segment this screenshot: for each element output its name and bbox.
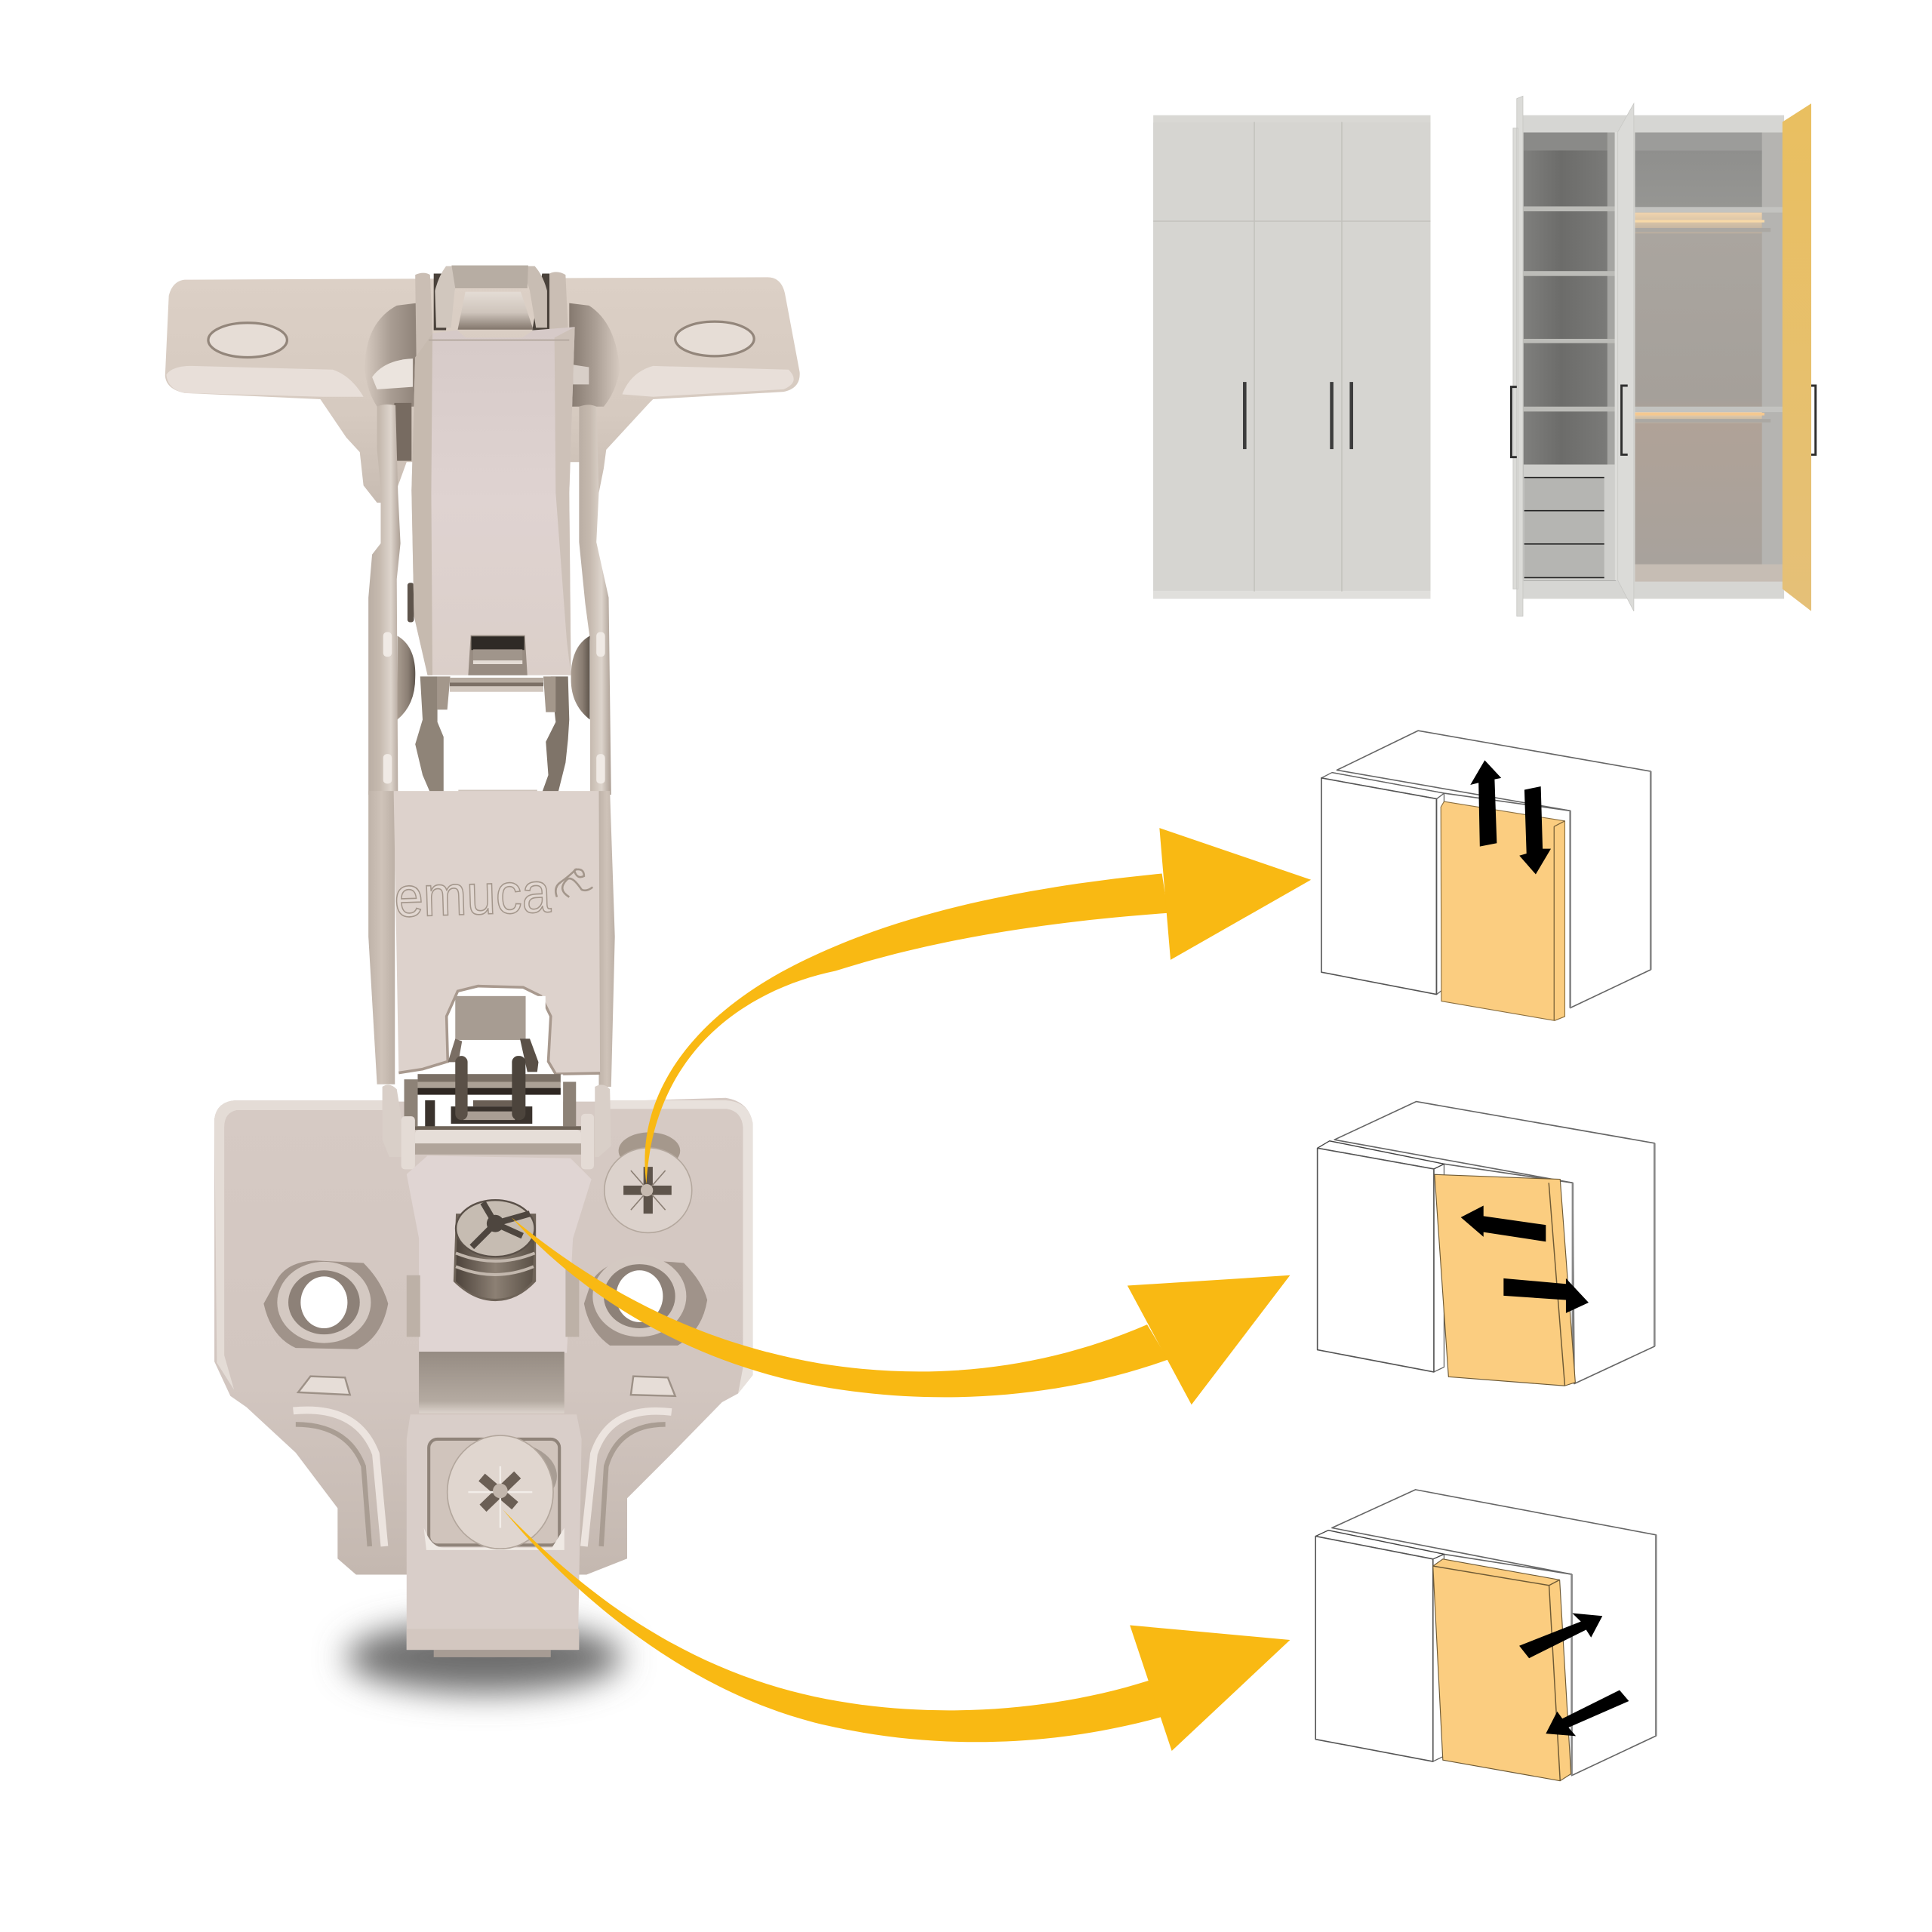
hinge mounting plate: [214, 1098, 753, 1575]
left compartment: [1524, 133, 1616, 581]
side arms: [368, 403, 611, 795]
left hole: [263, 1260, 388, 1349]
wardrobe open: [1511, 96, 1816, 616]
lower block: [407, 1414, 582, 1657]
window under bracket: [419, 1352, 565, 1414]
side screw: [605, 1132, 692, 1232]
arrow up: [1470, 760, 1501, 847]
arrow right: [1503, 1278, 1589, 1313]
ribs: [294, 1410, 672, 1546]
adjustment screw: [454, 1200, 536, 1301]
diagram: vertical adjustment: [1321, 731, 1651, 1020]
yellow door: [1783, 103, 1811, 611]
icon: handles open wardrobe: [1511, 386, 1816, 457]
left door edge: [1513, 96, 1523, 616]
right hole: [584, 1256, 707, 1346]
arrow: middle screw to lateral adjustment: [512, 1217, 1290, 1404]
shadow: [346, 1622, 622, 1693]
lower arm: [368, 790, 615, 1087]
drawers: [1524, 478, 1604, 578]
arrow left: [1461, 1206, 1546, 1241]
links between arms: [415, 676, 569, 792]
bottom screw: [448, 1435, 557, 1549]
cover slot: [468, 635, 528, 675]
hinge pivot: [383, 1056, 611, 1169]
hinge mounting cup plate top: [165, 277, 800, 503]
centre door edge: [1618, 103, 1634, 611]
arrow up right: [1519, 1613, 1602, 1658]
wardrobe closed: [1153, 115, 1431, 598]
rails with light: [1635, 213, 1770, 423]
right compartment: [1635, 133, 1783, 582]
arm slot: [448, 996, 546, 1072]
arrow: top screw to vertical adjustment: [645, 828, 1311, 1184]
door highlighted: [1441, 801, 1564, 1020]
arrow: bottom screw to depth adjustment: [503, 1509, 1290, 1751]
logo text: emuca: [393, 860, 552, 929]
door highlighted: [1435, 1174, 1575, 1386]
icon: handles closed wardrobe: [1243, 382, 1353, 449]
central bracket: [407, 1155, 592, 1353]
screw holes top plate: [208, 323, 287, 357]
hinge photo: [165, 266, 800, 1693]
door highlighted: [1433, 1559, 1571, 1781]
diagram: depth adjustment: [1315, 1490, 1656, 1781]
arrow down: [1519, 786, 1551, 875]
diagram: lateral adjustment: [1318, 1102, 1654, 1386]
arrow down left: [1546, 1690, 1629, 1736]
upper cover: [411, 266, 575, 675]
